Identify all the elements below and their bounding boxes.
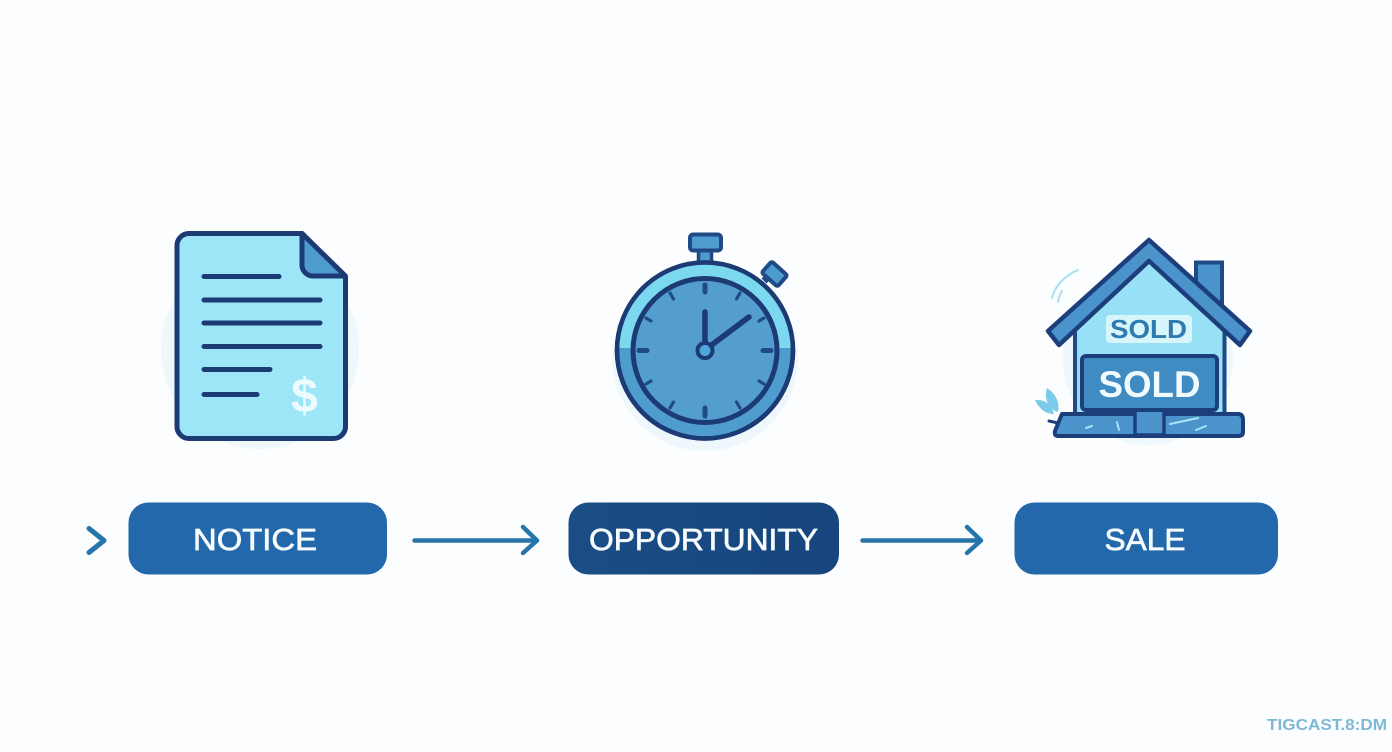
- step: opportunity: OPPORTUNITY: [589, 522, 818, 557]
- icon: stopwatch: [612, 234, 798, 451]
- watermark: TIGCAST.8:DM: [1267, 717, 1387, 734]
- step: sale: [1014, 502, 1278, 574]
- dollar sign: $: [291, 370, 318, 423]
- lawn and post: [1055, 410, 1243, 436]
- step: notice: [128, 502, 387, 574]
- small sold sign: SOLD: [1110, 314, 1187, 344]
- icon: notice document with dollar sign: [161, 234, 359, 449]
- large sold sign: [1082, 356, 1217, 410]
- arrow: opportunity to sale: [862, 527, 981, 553]
- clock ticks: [639, 285, 771, 416]
- step: opportunity: [568, 502, 839, 574]
- step: notice: NOTICE: [193, 522, 317, 557]
- step: sale: SALE: [1104, 522, 1186, 557]
- leaves: [1035, 388, 1059, 423]
- clock hands: [705, 312, 749, 347]
- chevron: start marker: [89, 528, 104, 552]
- large sold sign: SOLD: [1098, 364, 1200, 405]
- swoosh marks: [1052, 270, 1078, 302]
- icon: sold house: [1035, 240, 1250, 445]
- arrow: notice to opportunity: [414, 527, 537, 553]
